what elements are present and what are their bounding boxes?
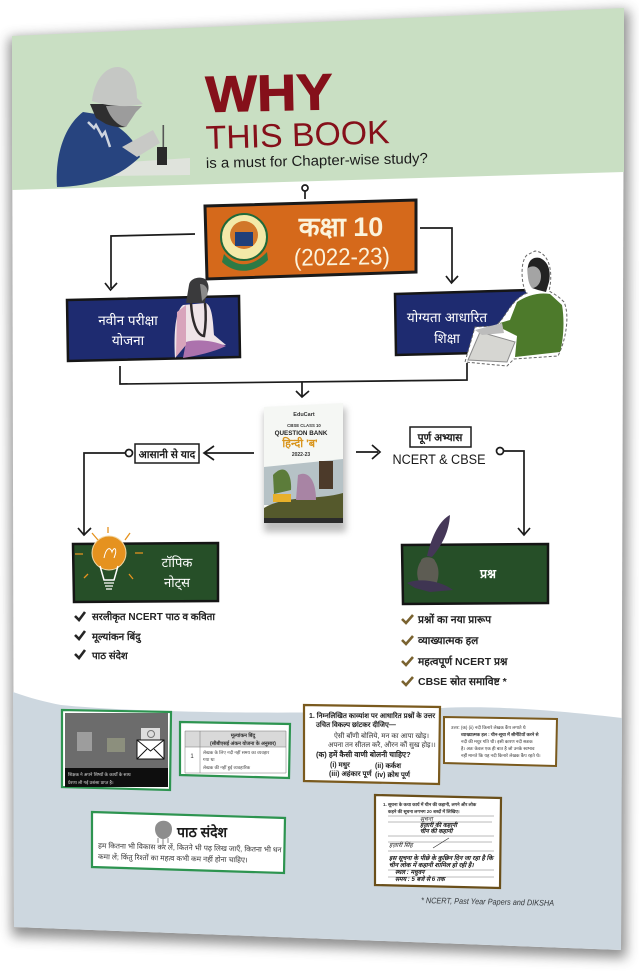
icon: gold check marks (402, 615, 413, 685)
card: message image (62, 710, 171, 790)
list: topic notes features: मूल्यांकन बिंदु (91, 630, 141, 644)
panel: new exam pattern (67, 278, 240, 361)
green header band (12, 8, 624, 190)
icon: CBSE seal (221, 214, 268, 271)
grey bottom band (13, 692, 622, 950)
card: answer explanation (444, 717, 557, 766)
card: assessment table: (सीबीएसई अंकन योजना के अनुसार) (210, 740, 276, 747)
icon: quill and ink (407, 515, 453, 592)
card body (98, 841, 282, 864)
label: नवीन परीक्षा (98, 312, 158, 328)
card: multiple choice question: (iv) क्रोध पूर्ण (375, 770, 411, 780)
arrows: flow connectors (78, 185, 530, 535)
book cover: EduCart (293, 412, 315, 418)
icon: check marks (75, 612, 85, 658)
card: assessment table (180, 722, 290, 778)
label: NCERT and CBSE: NCERT & CBSE (392, 452, 486, 467)
class label: कक्षा 10 (298, 212, 383, 242)
icon: light bulb (75, 527, 143, 589)
card: multiple choice question: उचित विकल्प छांटकर दीजिए— (315, 720, 396, 729)
list: topic notes features: सरलीकृत NCERT पाठ व कविता (91, 610, 215, 623)
card: multiple choice question: (iii) अहंकार पूर्ण (329, 769, 373, 779)
card: handwritten answer (375, 795, 501, 888)
card: handwritten answer: सूचना (420, 817, 434, 823)
label: full practice (410, 427, 471, 447)
label: योग्यता आधारित (407, 309, 487, 325)
card: answer explanation: नहीं मानते कि यह नदी किनारे लेखक कैंप रहते थे। (461, 752, 541, 758)
card: handwritten answer: इस सूचना के पीछे के कुछिन दिन जा रहा है कि (389, 854, 495, 862)
card: handwritten answer: चीन की कहानी (420, 827, 454, 835)
label: easy to remember: आसानी से याद (139, 448, 196, 461)
card: handwritten answer: समय : 5 बजे से 6 तक (395, 875, 446, 883)
panel: competency based education: शिक्षा (434, 330, 460, 346)
label: टॉपिक (162, 555, 193, 570)
card: multiple choice question: अपना तन सीतल करै, औरन कौं सुख होइ।। (328, 740, 436, 749)
card: multiple choice question: ऐसी बाँणी बोलिये, मन का आपा खोइ। (334, 731, 429, 740)
book cover: 2022-23 (292, 452, 310, 458)
subtitle: is a must for Chapter-wise study? (206, 151, 428, 172)
list: topic notes features (75, 610, 215, 662)
panel: questions (402, 515, 548, 604)
footnote: * NCERT, Past Year Papers and DIKSHA (421, 896, 555, 908)
card: multiple choice question (304, 705, 440, 784)
label: easy to remember (135, 444, 199, 463)
book cover: हिन्दी 'ब' (281, 436, 318, 450)
card: handwritten answer: 1. सूचना के कथा कार्य में चीन की कहानी, लगने और लोक (383, 801, 477, 808)
card: message image: प्रेरणा ली गई प्रशंसा प्राप्त है। (68, 779, 114, 785)
label: full practice: पूर्ण अभ्यास (417, 431, 463, 445)
list: question features: व्याख्यात्मक हल (417, 635, 479, 647)
card: handwritten answer: हज़ारी सिंह (389, 841, 414, 849)
icon: envelope (137, 728, 164, 759)
card: multiple choice question: (क) हमें कैसी वाणी बोलनी चाहिए? (316, 750, 411, 759)
card: assessment table: मूल्यांकन बिंदु (230, 732, 255, 739)
card: handwritten answer: चीन लोक में कहानी शामिल हो रही है। (389, 861, 474, 869)
panel: class 10 (205, 200, 416, 279)
card: assessment table: लेखक के लिए नदी नहीं समय का व्यवहार (203, 749, 269, 755)
card body: हम कितना भी विकास कर लें, कितने भी पढ़ लिख जाएँ, कितना भी धन (98, 841, 282, 854)
book cover: CBSE CLASS 10 (287, 423, 321, 428)
list: topic notes features: पाठ संदेश (91, 649, 129, 662)
card body: कमा लें; किंतु रिश्तों का महत्व कभी कम नहीं होना चाहिए। (98, 852, 248, 864)
title (205, 63, 390, 156)
list: question features (402, 613, 508, 688)
card: message image: शिक्षक ने अपने शिष्यों के कार्यों के साथ (68, 771, 131, 777)
card: answer explanation: व्याख्यात्मक हल : चीन-सूचा में सीमेंटियों करने से (460, 731, 540, 738)
panel: topic notes: नोट्स (164, 575, 190, 591)
card heading: पाठ संदेश (176, 824, 227, 840)
card: multiple choice question: 1. निम्नलिखित काव्यांश पर आधारित प्रश्नों के उत्तर (309, 711, 436, 720)
panel: topic notes (73, 527, 218, 602)
card: assessment table: 1 (190, 754, 194, 760)
label: प्रश्न (479, 567, 497, 581)
list: question features: प्रश्नों का नया प्रारूप (417, 613, 492, 626)
card: lesson message (92, 812, 285, 873)
list: question features: महत्वपूर्ण NCERT प्रश्न (417, 655, 508, 669)
card: multiple choice question: (i) मधुर (330, 762, 351, 770)
icon: worker with helmet drawing (57, 67, 190, 187)
title line: THIS BOOK: THIS BOOK (205, 113, 390, 156)
icon: seated man (175, 278, 226, 358)
title word: WHY: WHY (205, 63, 333, 123)
card: handwritten answer: हज़ारी की कहानी (420, 821, 458, 829)
card: multiple choice question: (ii) कर्कश (375, 761, 402, 770)
icon: lotus tree (155, 821, 172, 846)
card: answer explanation: उत्तर: (क) (ii) नदी किनारे लेखक कैंप लगाते थे (451, 724, 526, 730)
panel: competency based education (395, 251, 567, 366)
session year: (2022-23) (294, 243, 390, 272)
card: assessment table: गया था (203, 757, 215, 762)
card: answer explanation: नदी की मधुर गति थी। इसी कारण नदी सङक (461, 738, 533, 745)
card: handwritten answer: कहने की सूचना लगभग 20 शब्दों में लिखिए। (387, 808, 460, 815)
icon: woman with book (465, 251, 567, 366)
book cover (264, 403, 346, 532)
card: answer explanation: है। अतः केवल एक ही बात है जो उनके स्वभाव (461, 745, 535, 751)
list: question features: CBSE स्रोत समाविष्ट * (418, 675, 508, 688)
panel: new exam pattern: योजना (112, 332, 145, 348)
card: handwritten answer: स्थल : मधुवन (395, 870, 426, 876)
card: assessment table: लेखक की नहीं हुई व्यवहारिक (203, 764, 251, 771)
book cover: QUESTION BANK (275, 430, 328, 437)
